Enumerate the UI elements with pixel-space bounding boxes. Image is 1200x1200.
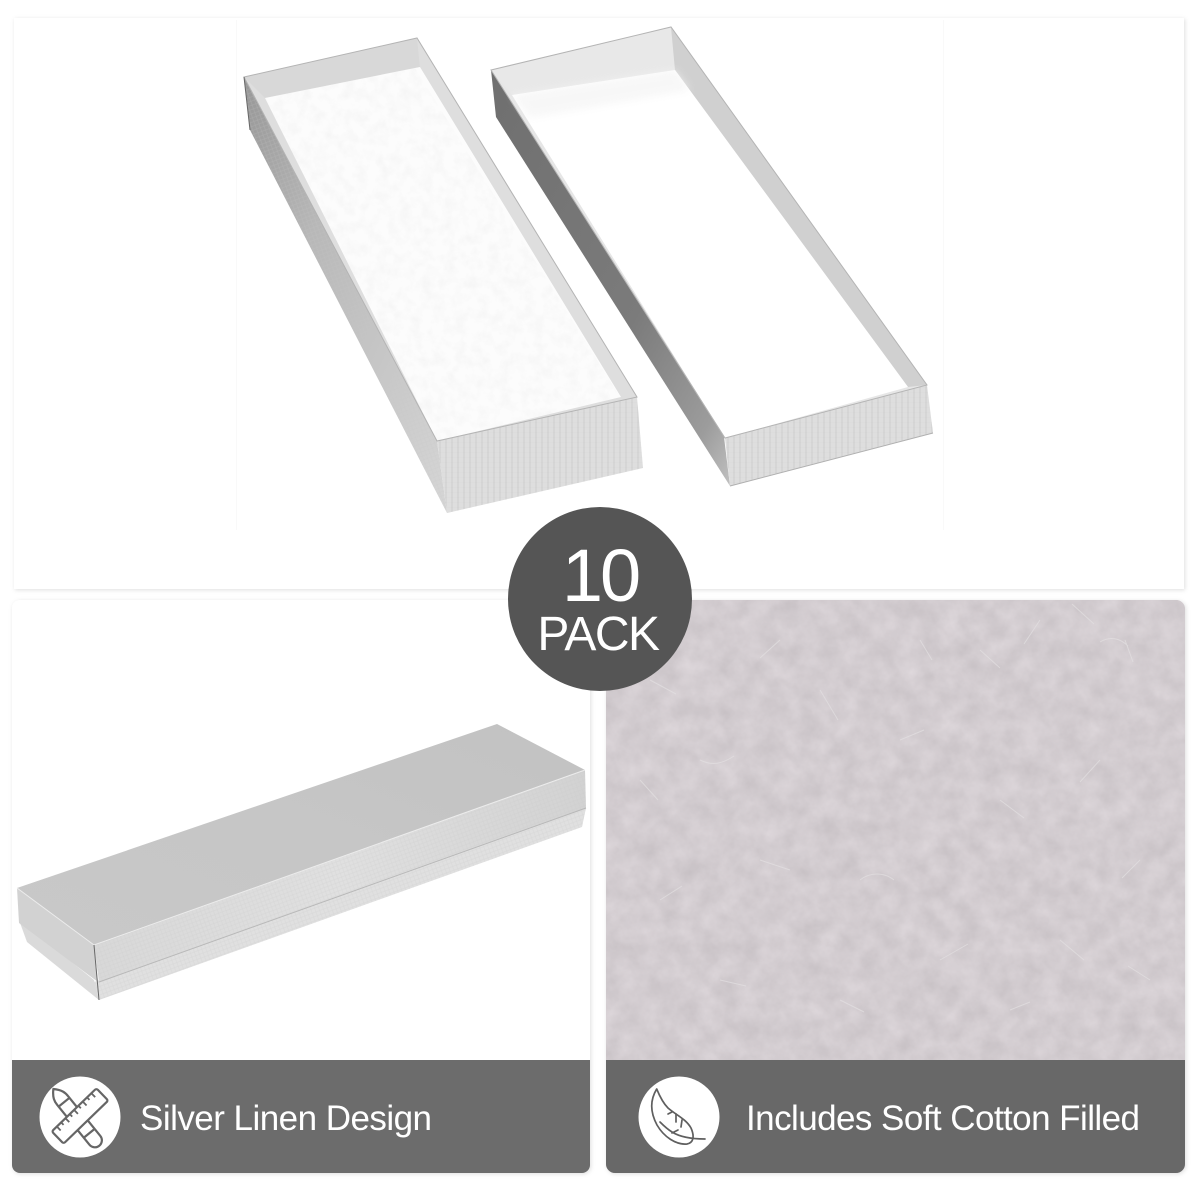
label: silver linen design: Silver Linen Design <box>140 1099 432 1138</box>
badge number: 10 <box>562 534 639 617</box>
open empty box lid <box>491 27 933 486</box>
badge label: PACK <box>537 608 660 661</box>
panel: open boxes photo <box>14 18 1184 589</box>
label: includes soft cotton filled: Includes Soft Cotton Filled <box>746 1099 1140 1138</box>
icon: feather <box>638 1076 720 1158</box>
icon: ruler and pencil <box>40 1076 120 1158</box>
badge: 10 pack <box>508 507 692 691</box>
panel: soft cotton texture <box>606 600 1185 1173</box>
panel: closed box <box>12 600 590 1173</box>
caption bar: silver linen design <box>12 1060 590 1173</box>
closed silver linen box <box>17 724 586 1000</box>
open box with cotton <box>244 38 643 513</box>
caption bar: soft cotton <box>606 1060 1185 1173</box>
